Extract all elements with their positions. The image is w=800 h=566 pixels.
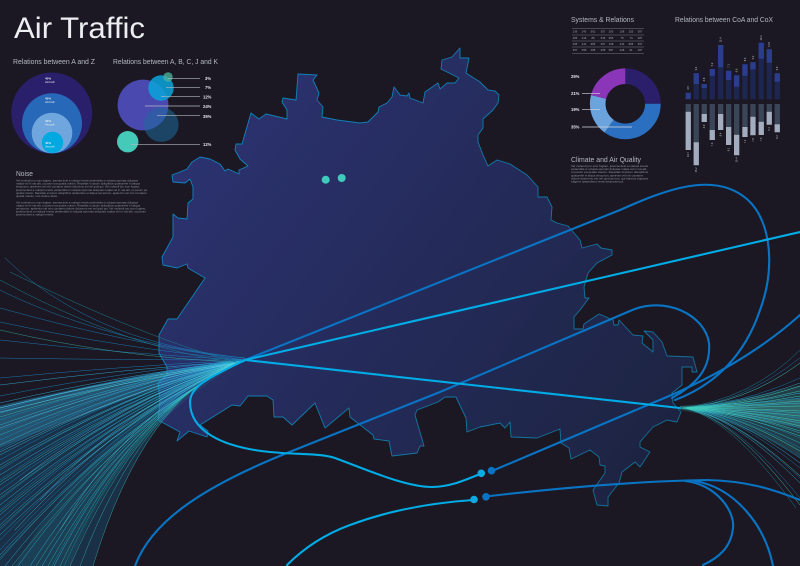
- map markers: two teal dots: [322, 174, 346, 184]
- route: hub to east edge: [245, 232, 800, 360]
- nested circle chart: 40%: [45, 141, 51, 145]
- bar value labels: 13.7: [686, 151, 690, 157]
- text block: climate and air quality: pedenditia si volupta spernas doluptas malpa vel in nat alit,: [571, 167, 647, 171]
- bar value labels: 10.4: [735, 157, 739, 163]
- data table: 387: [638, 36, 643, 40]
- bar value labels: 7.2: [743, 139, 747, 143]
- route: from upper marker to the east edge: [492, 315, 800, 471]
- overlapping bubble chart: 3%: [205, 76, 211, 81]
- data table: 562: [591, 30, 596, 34]
- route endpoint markers: [470, 467, 495, 503]
- text block: climate and air quality: [571, 155, 649, 184]
- flight fan: east of the hub: [680, 350, 800, 508]
- route: lower marker to the east edge: [490, 480, 800, 500]
- data table: 865: [629, 42, 634, 46]
- donut chart: [571, 74, 653, 131]
- data table: 218: [582, 36, 587, 40]
- bar value labels: [686, 35, 779, 173]
- text block: noise: malpa vel in nat alit, ut parum pa quatia maxim. Repellas si ipsum doluptibus quiaturehe et aliqua: [16, 182, 140, 186]
- flight routes: dark blue: [135, 185, 800, 566]
- data table: 283: [609, 30, 614, 34]
- data table: 285: [573, 36, 578, 40]
- heading: relations A, B, C, J, K: Relations between A, B, C, J and K: [113, 57, 218, 66]
- data table: 187: [638, 48, 643, 52]
- overlapping bubble chart: 12%: [203, 94, 212, 100]
- text block: climate and air quality: ut parum pa quatia maxim. Repellas si ipsum doluptibus: [571, 170, 649, 174]
- data table: 285: [591, 48, 596, 52]
- flight fan: west of the hub: [0, 258, 245, 566]
- bar value labels: 15.2: [694, 167, 698, 173]
- data table: 136: [573, 30, 578, 34]
- route: lower marker to south edge: [287, 500, 473, 565]
- heading: relations A and Z: Relations between A and Z: [13, 57, 95, 66]
- data table: 86: [591, 36, 595, 40]
- bar value labels: 7.5: [759, 137, 763, 141]
- data table: 357: [638, 42, 643, 46]
- bar value labels: 6.9: [775, 66, 779, 70]
- text block: noise: Vel molendi pro sum fugiam, ipsenta dest a malupti enetis pedenditia si volupta spernas doluptas: [16, 178, 138, 182]
- text block: noise: ipsenta dest a malupti enetis pedenditia si volupta spernas doluptas malpa vel in nat alit, ut parum: [16, 210, 146, 214]
- data table: 78: [620, 36, 624, 40]
- text block: noise: Vel molendi pro sum fugiam, ipsenta dest a malupti enetis pedenditia si volupta spernas doluptas: [16, 200, 138, 204]
- bar value labels: 13.0: [759, 35, 763, 41]
- data table: 546: [601, 36, 606, 40]
- bar value labels: 9.2: [751, 55, 755, 59]
- bar value labels: 9.4: [694, 66, 698, 70]
- donut chart: 21%: [571, 91, 580, 96]
- heading: systems and relations: Systems & Relations: [571, 15, 634, 24]
- text block: noise: temporum, apelenim vel min comatem dolore doloremo est vel quid qui. Vel molendi pro sum fugiam,: [16, 185, 140, 189]
- data table: 74: [629, 36, 633, 40]
- data table: 244: [582, 42, 587, 46]
- nested circle chart: 40%: [45, 119, 51, 123]
- data table: [572, 28, 644, 53]
- data table: 108: [609, 42, 614, 46]
- data table: 955: [609, 36, 614, 40]
- upper bars: CoA: [686, 43, 780, 99]
- data table: 985: [591, 42, 596, 46]
- route: lower branch curving back: [685, 481, 733, 565]
- text block: noise: malpa vel in nat alit, ut parum pa quatia maxim. Repellas si ipsum doluptibus quiaturehe et aliqua: [16, 204, 140, 208]
- text block: noise: [16, 169, 147, 216]
- route: hub hook to upper marker: [190, 360, 480, 487]
- bar value labels: 6.6: [735, 68, 739, 72]
- bar value labels: 3.5: [686, 86, 690, 90]
- text block: noise: quatia maxim. Repellas si ipsum doluptibus quiaturehe et aliqua temporum, apelenim vel min comatem: [16, 191, 147, 195]
- text block: noise: ipsenta dest a malupti enetis pedenditia si volupta spernas doluptas malpa vel in nat alit, ut parum pa: [16, 188, 147, 192]
- bar value labels: 7.3: [710, 142, 714, 146]
- heading: relations CoA and CoX: Relations between CoA and CoX: [675, 15, 773, 24]
- bar value labels: 11.5: [767, 42, 771, 47]
- text block: climate and air quality: Vel molendi pro sum fugiam, ipsenta dest a malupti enetis: [571, 164, 648, 168]
- donut chart: 35%: [571, 124, 580, 130]
- data table: 295: [573, 42, 578, 46]
- nested circle chart: [11, 72, 92, 154]
- bar value labels: 6.2: [775, 135, 779, 139]
- text block: climate and air quality: dolore doloremo est vel quid qui tus, qui harions equatus: [571, 176, 649, 180]
- nested circle chart: 40%: [45, 76, 51, 80]
- text block: noise: Noise: [16, 169, 33, 178]
- route: long curve over the north east: [245, 185, 769, 400]
- data table: 387: [609, 48, 614, 52]
- diverging bar chart: [686, 35, 780, 173]
- data table: 108: [620, 30, 625, 34]
- text block: climate and air quality: sitgent ipsandam rerat sequosmod.: [571, 180, 624, 184]
- nested circle chart: 40%: [45, 96, 51, 100]
- nested circle chart: Aircraft: [45, 144, 55, 148]
- overlapping bubble chart: [117, 72, 212, 152]
- text block: climate and air quality: quiaturehe et aliqua temporum, apelenim vel min comatem: [571, 173, 643, 177]
- text block: noise: temporum, apelenim vel min comatem dolore doloremo est vel quid qui. Vel molendi pro sum fugiam,: [16, 206, 146, 210]
- overlapping bubble chart: 35%: [203, 114, 212, 119]
- text block: noise: quatia maxim, nos dolore dolor.: [16, 194, 58, 198]
- nested circle chart: Aircraft: [45, 80, 55, 84]
- flight routes: bright cyan: [190, 232, 800, 565]
- bar value labels: 7.1: [727, 64, 731, 68]
- bar value labels: 8.3: [743, 57, 747, 61]
- bar value labels: 6.4: [719, 132, 723, 136]
- overlapping bubble chart: 24%: [203, 104, 212, 109]
- overlapping bubble chart: 12%: [203, 142, 212, 147]
- data table: 357: [601, 30, 606, 34]
- title: Air Traffic: [14, 12, 145, 45]
- donut chart: 25%: [571, 74, 580, 79]
- map: region outline: [158, 48, 697, 506]
- data table: 243: [582, 30, 587, 34]
- lower bars: CoX: [686, 104, 780, 165]
- route: lower branch to the south: [695, 481, 773, 566]
- nested circle chart: Aircraft: [45, 122, 55, 126]
- data table: 357: [601, 42, 606, 46]
- bar value labels: 4.8: [702, 77, 706, 81]
- donut chart: 19%: [571, 107, 580, 112]
- route: hub to eastern fan: [245, 360, 680, 408]
- overlapping bubble chart: 7%: [205, 85, 211, 90]
- text block: climate and air quality: Climate and Air Quality: [571, 155, 641, 164]
- bar value labels: 9.1: [727, 147, 731, 151]
- data table: 255: [601, 48, 606, 52]
- bar value labels: 12.4: [719, 37, 723, 43]
- route: loop past the eastern hub: [135, 305, 709, 566]
- bar value labels: 7.8: [751, 138, 755, 142]
- data table: 387: [638, 30, 643, 34]
- data table: 255: [629, 30, 634, 34]
- text block: noise: ipsenta dest a malupti enetis.: [16, 212, 54, 216]
- data table: 255: [582, 48, 587, 52]
- data table: 357: [573, 48, 578, 52]
- bar value labels: 5.2: [710, 62, 714, 66]
- bar value labels: 4.9: [702, 124, 706, 128]
- bar value labels: 5.1: [767, 127, 771, 131]
- data table: 244: [620, 42, 625, 46]
- nested circle chart: Aircraft: [45, 100, 55, 104]
- data table: 91: [629, 48, 633, 52]
- data table: 228: [620, 48, 625, 52]
